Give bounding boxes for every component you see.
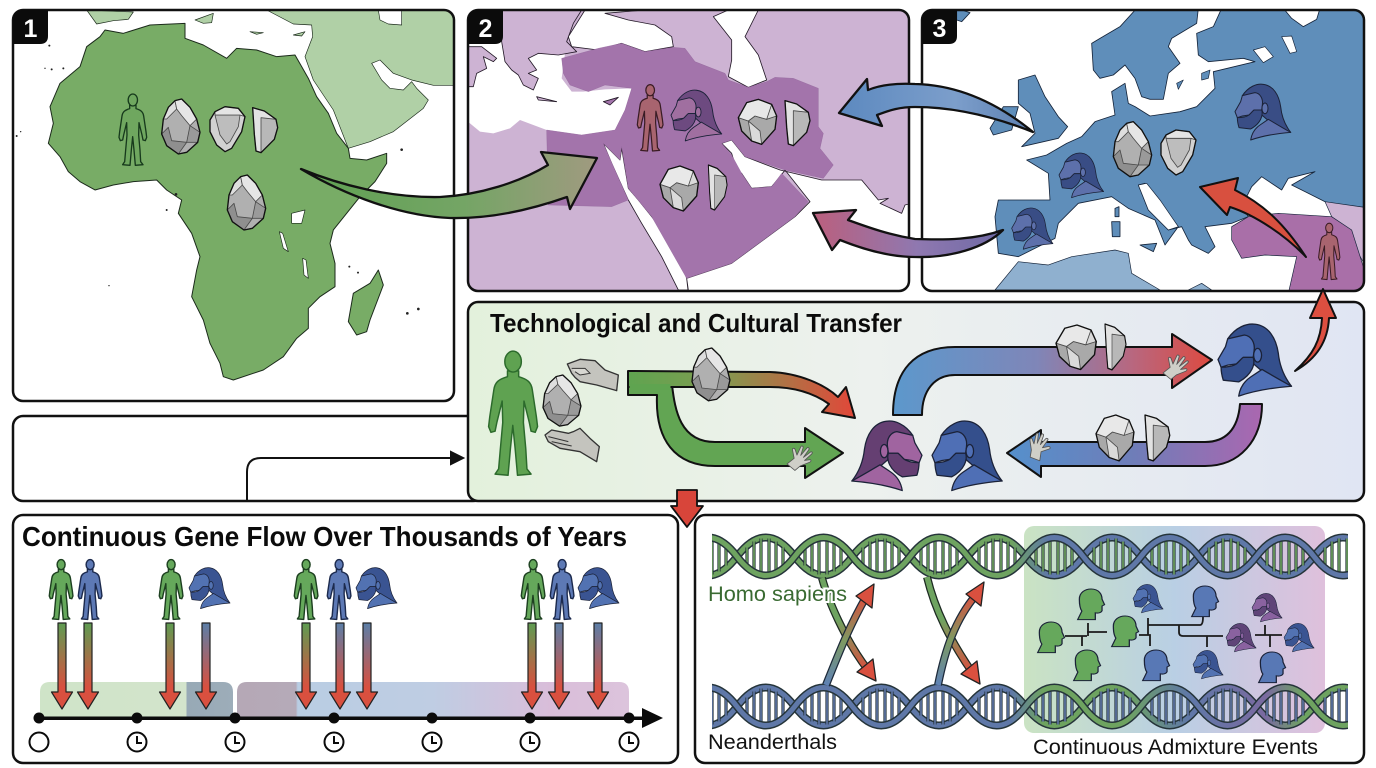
map: Scandinavia [1092,8,1198,99]
icon: stone on upper arrow [692,348,730,401]
pedigree lines [1065,617,1282,647]
panel 3: Europe map [922,8,1372,293]
crossover arrows [822,577,984,685]
icon: stone blade [785,101,810,146]
arrow: connector to transfer panel [247,452,463,501]
icon: stone blade [253,108,278,153]
icon: human blue [327,560,351,619]
timeline axis [34,708,663,728]
icon: human blue [550,560,574,619]
icon: human green [294,560,318,619]
arrow: Iberia to Arabia [813,210,1003,257]
icon: stone core lower [227,175,266,230]
panel: Continuous Gene Flow [13,515,678,763]
icon: human green [521,560,545,619]
icon: purple head [852,421,922,491]
map: Italy [465,47,497,87]
map: Iceland corner [957,11,970,22]
icon: lower hand [545,428,599,462]
label: Neanderthals: Neanderthals [708,731,837,754]
icon: green human [489,351,538,475]
map: small island dots [16,45,420,315]
clocks [30,732,638,752]
map: Ireland [990,107,1018,135]
panel: empty connector box [13,416,483,501]
map: lakes [279,210,308,278]
panel: Technological and Cultural Transfer [468,302,1364,501]
icon: head blue [1143,650,1170,681]
icon: head green [1112,616,1139,647]
icon: human green [49,560,73,619]
icon: blade on top arrow [1105,324,1126,370]
icon: stone on top arrow [1056,325,1096,370]
icon: stone on bottom arrow [1096,415,1134,461]
arrow: Africa to Middle East [301,152,597,218]
icon: stone blade lower [708,165,727,210]
map: dark purple Levant region [547,43,833,278]
icon: neanderthal blue [1133,584,1163,613]
map: purple Anatolia and Levant [1232,213,1372,293]
icon: head green [1074,650,1101,681]
icon: head blue [1192,586,1219,617]
arrow: Britain to Middle East [839,79,1033,132]
badge: number 3 [922,10,957,44]
map: light blue North Africa [995,250,1212,290]
map: islands [195,13,305,36]
arrow: tech panel up to Europe [1295,289,1336,371]
icon: stone shield lower [660,166,698,211]
icon: hand on top arrow [1160,350,1192,384]
map: seas [568,10,912,293]
map: Great Britain [1018,75,1068,147]
icon: head green [1038,622,1065,653]
map: Mediterranean [469,42,632,135]
icon: neanderthal head [356,568,397,609]
arrow: purple to blue lower [1007,404,1262,477]
map: Madagascar [348,270,383,335]
icon: hand on bottom arrow [1022,430,1054,464]
arrow: green lower [628,385,843,478]
badge: number 3: 3 [933,15,946,43]
icon: upper hand [567,359,618,391]
icon: human blue [78,560,102,619]
icon: neanderthal purple [1252,593,1282,622]
icon: neanderthal head east [1235,84,1291,140]
panel 2: Middle East map [465,10,912,293]
dna helix: bottom [679,688,1372,726]
icon: human red [637,85,663,151]
icon: blade on bottom arrow [1145,415,1170,461]
icon: human red [1319,223,1340,280]
panel: DNA admixture [679,515,1372,763]
map: Balkans [502,10,582,90]
badge: number 2 [468,10,503,44]
icon: neanderthal head [578,568,619,609]
icon: stone core [1113,122,1152,177]
heading: Technological and Cultural Transfer [490,308,902,338]
icon: stone shield [738,99,777,144]
arrow: green to red upper [628,371,855,418]
icon: hand on green arrow [784,441,816,475]
map: Mediterranean islands [1112,207,1157,252]
icon: human green [159,560,183,619]
icon: neanderthal blue [1193,650,1223,679]
map: Adriatic [1138,183,1178,230]
icon: stone [543,375,581,426]
map: Africa [48,23,387,380]
arrow: transfer panel down to lower panels [671,490,703,527]
timeline band blue purple [237,682,629,717]
arrow: blue to red upper [893,334,1212,415]
badge: number 1 [13,10,48,44]
icon: head green [1078,589,1105,620]
badge: number 2: 2 [479,15,492,43]
icon: blue head top right [1218,324,1291,396]
icon: stone scraper [210,107,245,152]
map: light green Iberia [87,10,133,24]
icon: neanderthal blue [1284,623,1314,652]
heading: Continuous Gene Flow Over Thousands of Years [22,521,627,552]
map: Cyprus [603,97,618,105]
icon: stone scraper [1161,130,1196,175]
icon: neanderthal head Iberia [1012,208,1053,249]
map: light purple east [1324,201,1363,262]
down arrows [52,623,608,709]
icon: blue head [932,421,1002,491]
icon: neanderthal head France [1059,153,1104,198]
map: mainland Europe [995,8,1372,257]
icon: neanderthal purple [1226,623,1256,652]
icon: stone core [162,99,200,154]
pedigree [1038,584,1314,683]
icon: neanderthal head purple [671,90,722,141]
admixture background [1024,526,1325,733]
panel 1: Africa map [13,10,455,401]
map: Crete [537,97,557,102]
timeline band green [40,682,233,717]
icon: human [119,94,147,165]
map: white lakes [1253,36,1297,63]
dna helix: top [679,538,1372,576]
map: light green Arabia and Near East [267,10,455,148]
map: Baltic islands [1177,70,1210,89]
figures [49,560,619,619]
arrow join [630,384,670,390]
icon: neanderthal head [189,568,230,609]
label: Continuous Admixture Events: Continuous Admixture Events [1033,736,1318,759]
label: Homo sapiens: Homo sapiens [708,583,847,606]
icon: head blue [1259,652,1286,683]
arrow: Levant to Europe [1200,178,1306,257]
badge: number 1: 1 [24,15,38,43]
